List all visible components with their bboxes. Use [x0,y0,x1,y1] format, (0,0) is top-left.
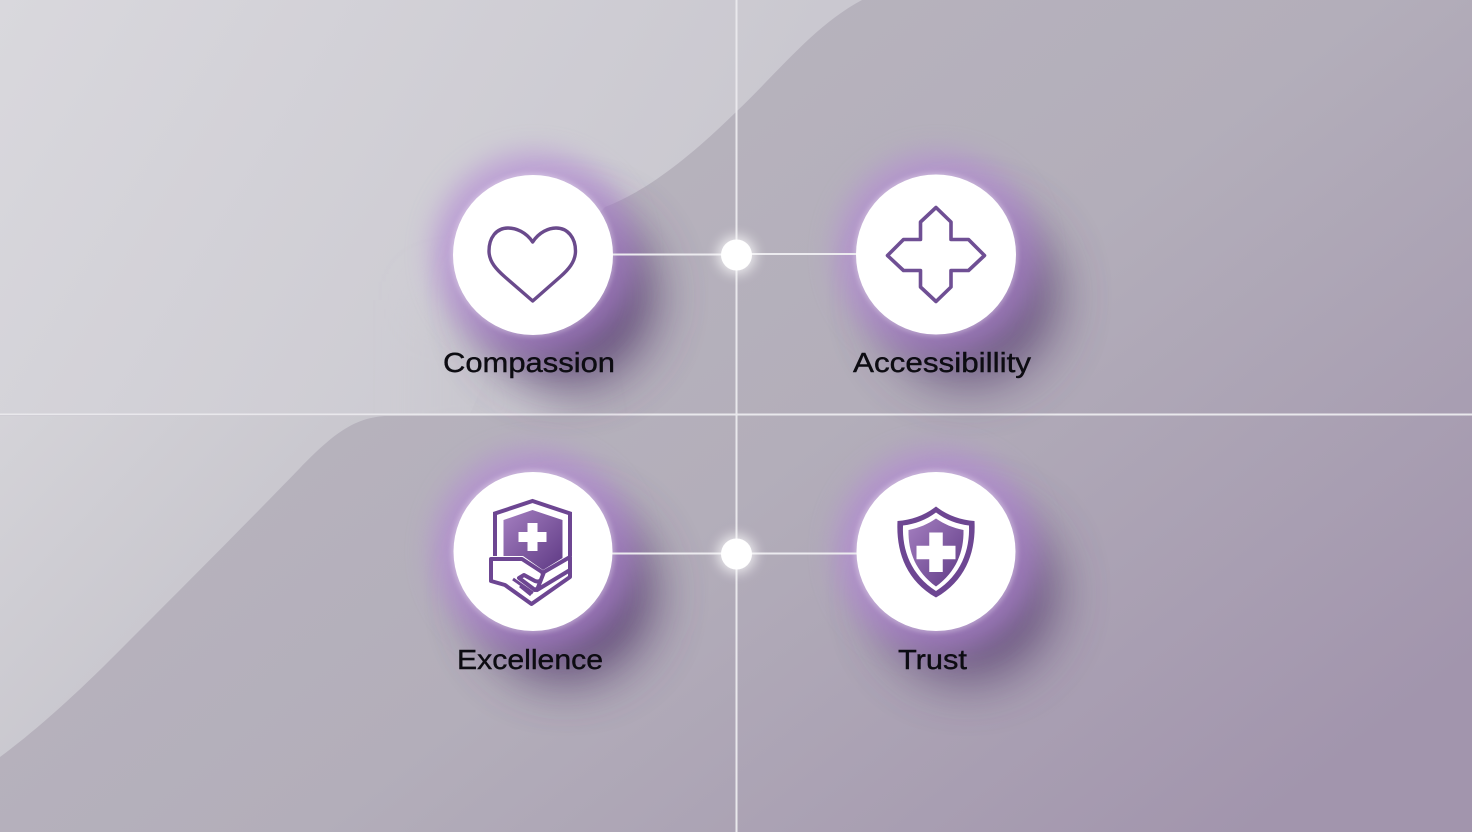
label: Excellence [457,644,603,675]
connector [748,253,860,255]
icon: cross outline [888,208,984,302]
shadow and glow [432,152,654,384]
connector [610,552,725,554]
icon: shield with cross [897,506,975,598]
shadow and glow [432,449,654,681]
background wave: upper light region [0,0,862,414]
background wave: lower light region [0,416,385,757]
icon: heart [489,228,576,301]
connector node: bottom [718,535,756,573]
label: Accessibillity [853,347,1031,378]
label: Compassion [443,347,615,378]
label: Trust [898,644,967,675]
white disc [856,472,1016,631]
value: Excellence [432,449,725,681]
value: Trust [748,449,1056,681]
icon: shield with handshake [491,501,570,604]
connector node: top [718,236,756,274]
white disc [453,175,613,335]
white disc [454,472,612,631]
connector [748,552,860,554]
soft fade of upper light region [470,348,570,414]
connector [610,254,725,256]
shadow and glow [835,449,1056,681]
value: Compassion [432,152,725,384]
white disc [856,174,1016,334]
value: Accessibility [748,152,1057,384]
shadow and glow [835,152,1057,384]
